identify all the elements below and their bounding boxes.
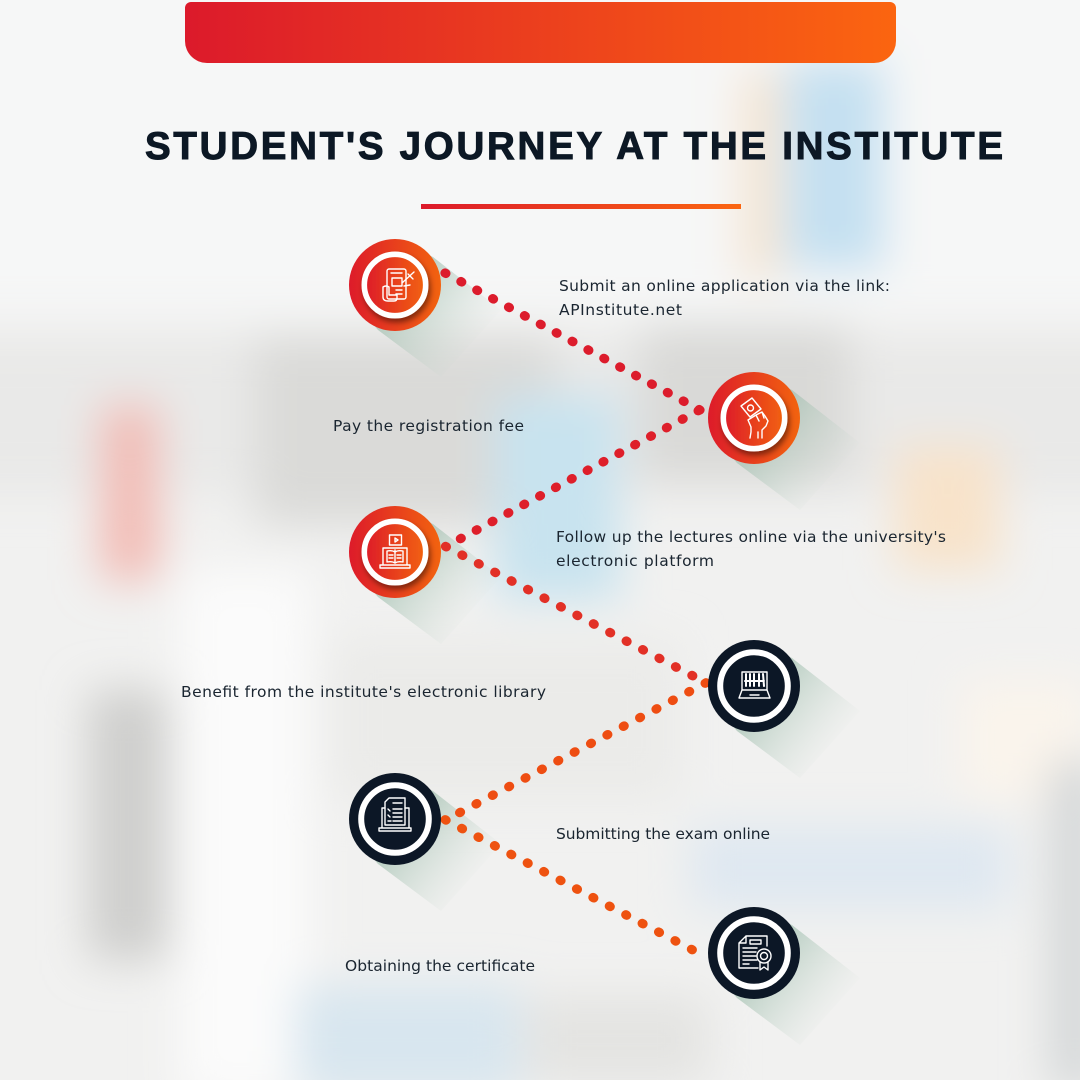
- dotted connector: step 3 to 4: [446, 546, 707, 683]
- icon: laptop with open book: [380, 535, 410, 568]
- step 2 text: Pay the registration fee: [333, 417, 524, 435]
- icon: phone form with hand: [383, 269, 414, 301]
- icon: certificate with seal: [739, 936, 771, 970]
- dotted connector: step 2 to 3: [446, 410, 699, 546]
- step 3 text: Follow up the lectures online via the university's: [556, 528, 946, 546]
- long shadows behind nodes: [365, 239, 860, 1045]
- top gradient bar: [185, 2, 896, 63]
- step 4 node: electronic library: [708, 640, 800, 732]
- icon: laptop with checklist: [379, 798, 411, 831]
- step 5 node: exam online: [349, 773, 441, 865]
- icon: laptop with books: [739, 672, 770, 698]
- title: STUDENT'S JOURNEY AT THE INSTITUTE: [145, 125, 1003, 168]
- title underline: [421, 204, 741, 209]
- step 4 text: Benefit from the institute's electronic library: [181, 683, 546, 701]
- step 2 node: registration fee: [708, 372, 800, 464]
- icon: hand holding money: [741, 398, 768, 438]
- step 1 link text: APInstitute.net: [559, 301, 682, 319]
- step 5 text: Submitting the exam online: [556, 825, 770, 843]
- dotted connector: step 5 to 6: [445, 820, 706, 957]
- dotted connector: step 1 to 2: [445, 273, 700, 410]
- step 3 text line 2: electronic platform: [556, 552, 714, 570]
- step 1 text: Submit an online application via the link:: [559, 277, 890, 295]
- step 6 node: certificate: [708, 907, 800, 999]
- dotted connector: step 4 to 5: [446, 683, 706, 820]
- step 1 node: online application: [349, 239, 441, 331]
- step 6 text: Obtaining the certificate: [345, 957, 535, 975]
- step 3 node: lectures online: [349, 506, 441, 598]
